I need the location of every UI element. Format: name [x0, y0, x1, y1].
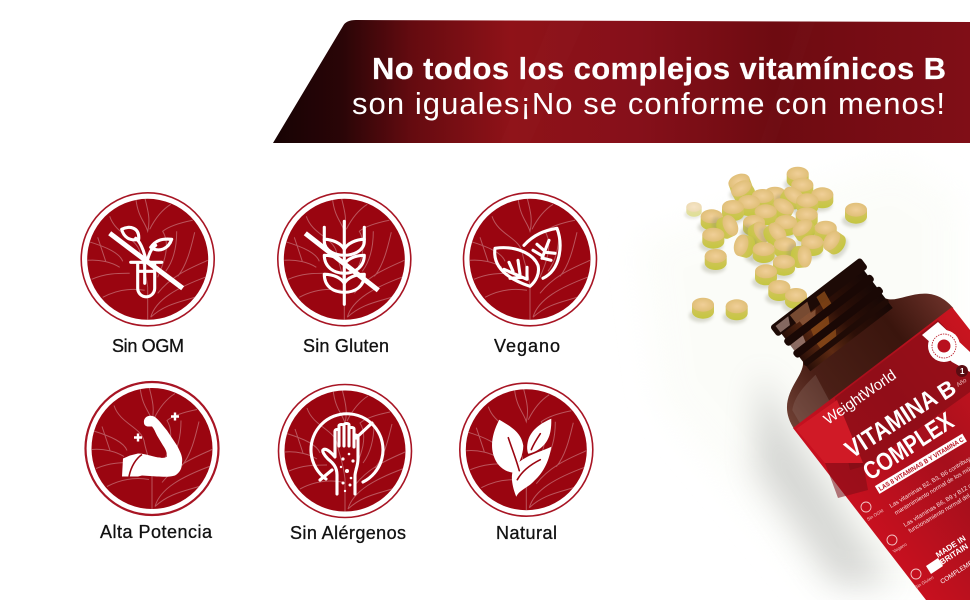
label lower dark band	[825, 463, 868, 498]
seal badge	[922, 322, 970, 372]
small diet icons	[861, 502, 921, 579]
one-year badge: 1	[960, 367, 965, 376]
icon: plant in test tube crossed out	[110, 227, 183, 297]
product bottle	[736, 231, 970, 600]
panel: faint photo backdrop	[640, 160, 960, 590]
made in Britain mark: BRITAIN	[938, 542, 970, 567]
icon: three solid leaves	[492, 419, 551, 497]
one-year badge	[956, 365, 969, 389]
badge: Natural	[460, 383, 593, 516]
icon: wheat crossed out	[305, 221, 378, 304]
icon: hand with allergy spots in prohibition circle	[311, 414, 383, 494]
label bright panel	[796, 400, 863, 463]
heading line 1: No todos los complejos vitamínicos B	[372, 51, 946, 86]
product name: VITAMINA	[840, 384, 942, 464]
icon: flexed arm	[122, 412, 182, 477]
badge: Vegano	[464, 193, 596, 326]
badge: Alta Potencia	[86, 382, 218, 515]
small diet labels: Sin Gluten	[914, 574, 935, 590]
label: Sin Alérgenos: Sin Alérgenos	[290, 523, 406, 543]
label base	[793, 307, 970, 600]
photo: scattered tablets	[684, 167, 867, 324]
one-year badge: Año	[956, 377, 969, 389]
label: Sin OGM: Sin OGM	[112, 336, 184, 356]
badge: Sin OGM	[81, 193, 214, 326]
label: Natural: Natural	[496, 523, 557, 543]
heading line 2: son iguales¡No se conforme con menos!	[352, 86, 945, 121]
product name: B	[933, 374, 961, 405]
small diet labels	[866, 508, 935, 590]
small diet labels: Vegano	[892, 541, 908, 554]
label dark panel	[835, 320, 970, 470]
made in Britain mark: MADE IN	[934, 534, 968, 560]
small diet labels: Sin OGM	[866, 508, 885, 522]
header banner	[273, 20, 970, 143]
made in Britain mark	[926, 534, 970, 586]
label: Alta Potencia: Alta Potencia	[100, 522, 213, 542]
label: Sin Gluten: Sin Gluten	[303, 336, 389, 356]
badge: Sin Gluten	[278, 193, 411, 326]
bottle shadow	[755, 370, 890, 585]
brand name: WeightWorld	[821, 367, 899, 428]
bottle glass	[736, 231, 953, 430]
label: Vegano: Vegano	[494, 336, 560, 356]
icon: two leaves	[495, 228, 560, 286]
badge: Sin Alérgenos	[278, 384, 412, 518]
